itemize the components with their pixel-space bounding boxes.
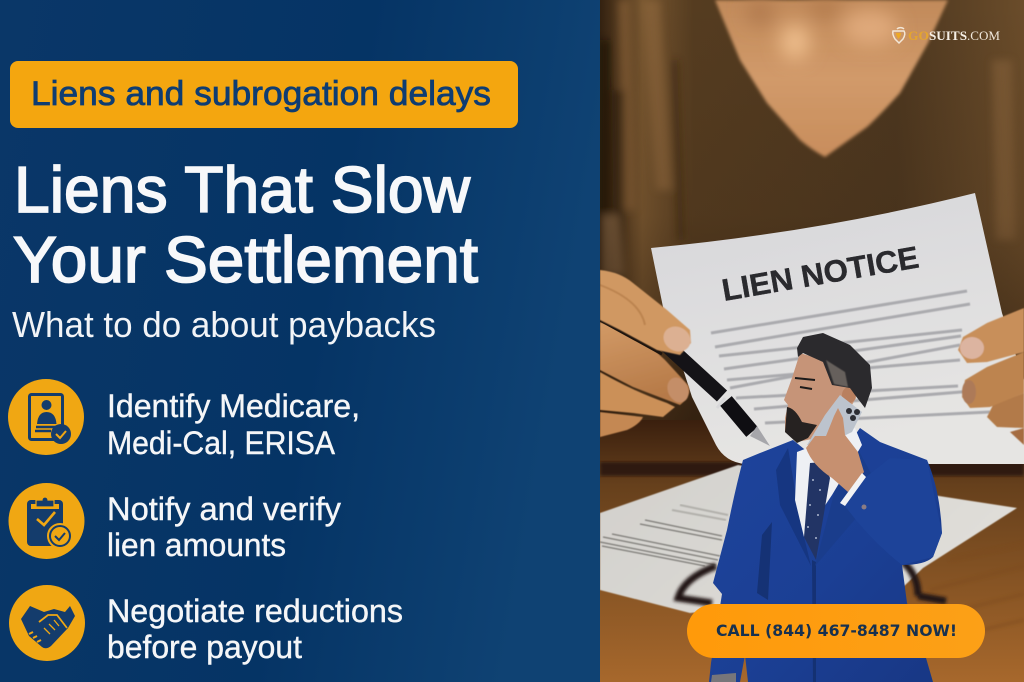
left hand [600, 322, 693, 437]
phone [807, 395, 862, 445]
category badge: Liens and subrogation delays [31, 75, 491, 113]
document on table [600, 465, 1017, 613]
logo: GO [908, 28, 929, 43]
title [13, 153, 478, 296]
call to action button [687, 604, 985, 658]
icon: handshake [9, 585, 85, 661]
shirt [795, 428, 862, 537]
logo: .COM [967, 28, 1000, 43]
subtitle: What to do about paybacks [12, 304, 436, 345]
icon: clipboard with check [8, 483, 84, 559]
thumb [600, 270, 695, 356]
list text: Negotiate reductions [107, 593, 403, 629]
photo background: blouse [600, 0, 1024, 420]
suit jacket [709, 428, 942, 682]
paper text lines [711, 291, 990, 423]
photo background: neckline skin [715, 0, 948, 157]
logo: SUITS [929, 28, 967, 43]
glasses on table [678, 562, 946, 603]
beard [785, 407, 817, 443]
icon: ID document with check [8, 379, 84, 455]
face [784, 353, 856, 442]
list text: Medi-Cal, ERISA [107, 425, 336, 461]
list text [107, 593, 403, 665]
call to action button: CALL (844) 467-8487 NOW! [716, 621, 957, 640]
ear [842, 387, 856, 403]
jacket shadows [757, 522, 816, 682]
watch [711, 673, 736, 682]
category badge [10, 61, 518, 128]
list text: Identify Medicare, [107, 388, 360, 424]
panel: navy text panel [0, 0, 600, 682]
list item: identify [8, 379, 360, 461]
lien notice heading: LIEN NOTICE [719, 240, 921, 308]
photo background: table [600, 420, 1024, 682]
logo [893, 28, 1000, 43]
panel: photo of lien notice and attorney [600, 0, 1024, 682]
list text: Notify and verify [107, 491, 341, 527]
lower fingers [600, 412, 643, 437]
list text: lien amounts [107, 527, 286, 563]
greying temple [826, 360, 848, 387]
phone hand [806, 408, 864, 492]
sleeve [845, 458, 942, 565]
pen [600, 320, 770, 446]
list item: notify [8, 483, 341, 563]
attorney on phone [709, 333, 942, 682]
lapels [776, 448, 811, 566]
list item: negotiate [9, 585, 403, 665]
list text [107, 491, 341, 563]
hair [797, 333, 872, 408]
lien notice paper [651, 193, 1024, 464]
list text: before payout [107, 629, 302, 665]
list text [107, 388, 360, 461]
title: Liens That Slow [14, 153, 471, 226]
shirt cuff [840, 473, 866, 506]
right hand [958, 308, 1024, 445]
tie [804, 462, 830, 560]
eye and brow [795, 378, 815, 389]
title: Your Settlement [13, 223, 478, 296]
